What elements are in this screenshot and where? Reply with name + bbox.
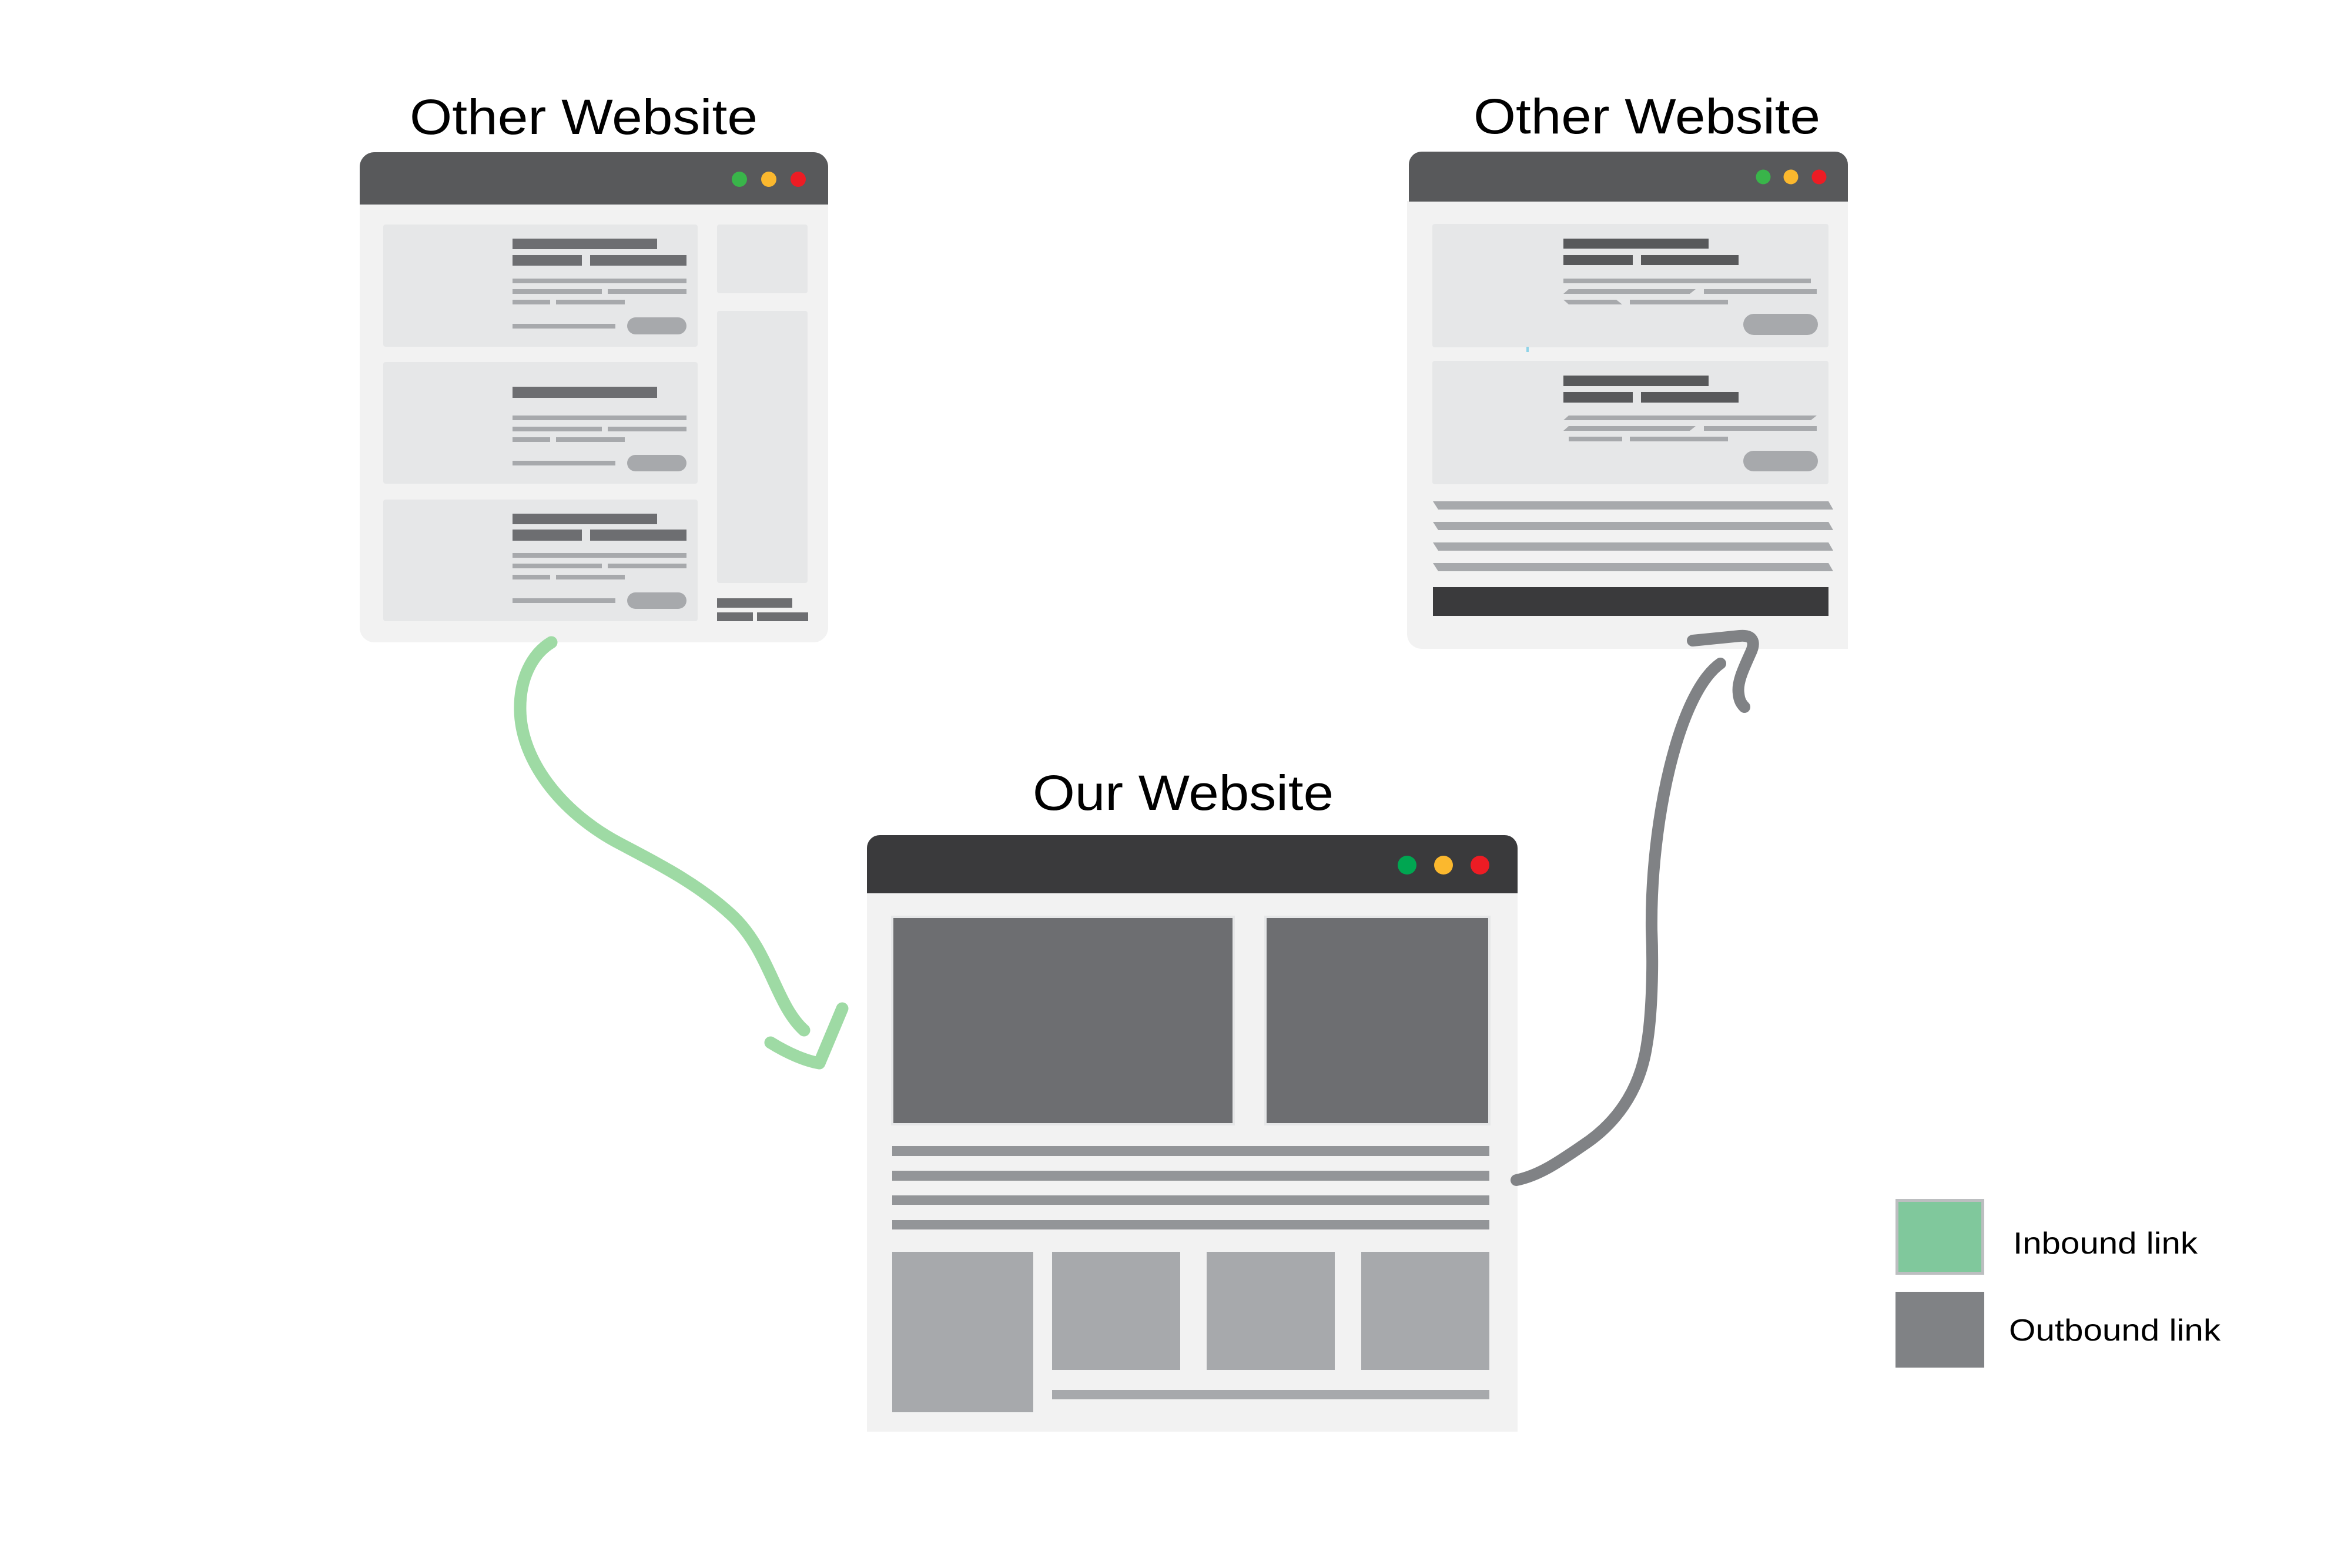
article card 3 — [383, 500, 698, 621]
arrow: inbound link (green) — [520, 642, 842, 1063]
arrow: outbound link (gray) — [1516, 636, 1753, 1180]
panel: right other website browser — [1407, 152, 1848, 649]
browser body — [867, 893, 1518, 1432]
hero image blocks — [892, 917, 1489, 1124]
article card 2 — [1432, 361, 1828, 484]
speck — [1526, 347, 1529, 352]
legend — [1895, 1200, 2221, 1368]
sidebar — [717, 225, 808, 621]
window control dots — [1398, 856, 1489, 875]
window control dots — [732, 172, 806, 187]
browser header bar — [1409, 152, 1848, 202]
text lines — [1433, 501, 1833, 571]
article card 2 — [383, 362, 698, 484]
legend label: inbound: Inbound link — [2013, 1227, 2198, 1261]
browser header bar — [867, 835, 1518, 893]
legend swatch: outbound — [1895, 1292, 1984, 1368]
article card 1 — [383, 225, 698, 347]
heading: Other Website (left): Other Website — [410, 89, 758, 145]
browser body — [1407, 201, 1848, 649]
browser body — [360, 205, 828, 642]
bottom blocks — [892, 1252, 1489, 1412]
heading: Our Website: Our Website — [1033, 765, 1334, 820]
heading: Other Website (right): Other Website — [1473, 89, 1820, 144]
dark link bar — [1433, 587, 1828, 616]
panel: left other website browser — [360, 152, 828, 642]
window control dots — [1756, 169, 1827, 185]
legend swatch: inbound — [1897, 1200, 1983, 1273]
panel: our website browser — [867, 835, 1518, 1432]
article card 1 — [1432, 224, 1828, 347]
legend label: outbound: Outbound link — [2009, 1314, 2221, 1348]
browser header bar — [360, 152, 828, 205]
text lines — [892, 1146, 1489, 1229]
